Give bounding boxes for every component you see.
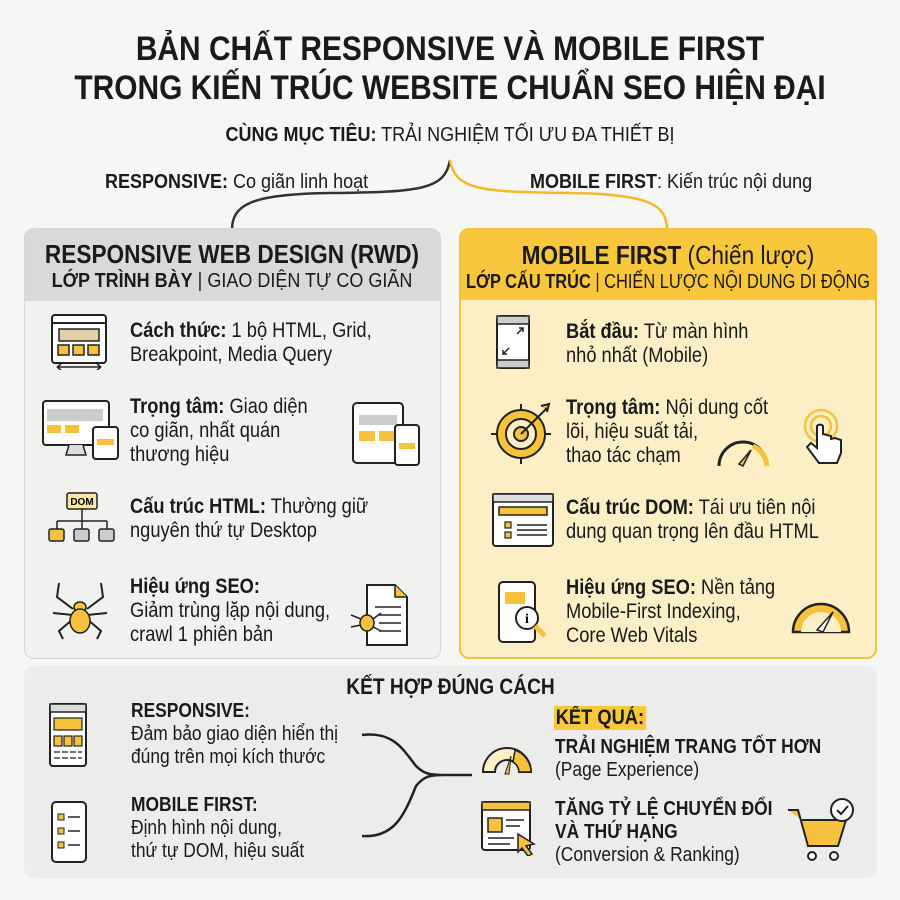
text: cấu trúc html: [130, 495, 368, 542]
text: hiệu ứng seo: Hiệu ứng SEO:: [130, 575, 260, 598]
icon: target: [491, 402, 551, 464]
text: hiệu ứng seo: [130, 575, 330, 646]
text: hiệu ứng seo: Core Web Vitals: [566, 624, 697, 647]
title: BẢN CHẤT RESPONSIVE VÀ MOBILE FIRST: [136, 30, 764, 68]
text: mobile first: [131, 794, 304, 862]
icon: spider: [52, 582, 108, 640]
icon: gauge large: [792, 602, 850, 634]
text: responsive: RESPONSIVE:: [131, 700, 250, 722]
icon: cart with check: [788, 798, 854, 861]
text: hiệu ứng seo: [566, 576, 775, 647]
text: trọng tâm: lõi, hiệu suất tải,: [566, 420, 698, 443]
label: kết quả: KẾT QUẢ:: [556, 706, 644, 729]
text: trọng tâm: co giãn, nhất quán: [130, 419, 280, 442]
icon: browser click: [481, 801, 536, 856]
text: cấu trúc html: Cấu trúc HTML: Thường giữ: [130, 495, 368, 518]
text: better page experience: [555, 734, 821, 781]
text: trọng tâm: Trọng tâm: Giao diện: [130, 395, 308, 418]
icon: touch hand: [804, 408, 842, 464]
text: cấu trúc dom: dung quan trọng lên đầu HTML: [566, 520, 819, 543]
arrow: merge: [362, 733, 472, 838]
text: trọng tâm: [566, 396, 768, 467]
text: responsive: Đảm bảo giao diện hiển thị: [131, 723, 338, 745]
text: conversion & ranking: TĂNG TỶ LỆ CHUYỂN ĐỔI: [555, 798, 773, 820]
panel: responsive web design: [24, 228, 441, 659]
icon: phone with info magnifier: [498, 581, 547, 643]
panel header: [25, 229, 442, 301]
text: responsive: [131, 700, 338, 768]
text: trọng tâm: Trọng tâm: Nội dung cốt: [566, 396, 768, 419]
text: mobile first: thứ tự DOM, hiệu suất: [131, 840, 304, 862]
panel header: MOBILE FIRST (Chiến lược): [522, 240, 814, 270]
icon: layout grid: [51, 314, 107, 370]
text: cấu trúc dom: [566, 496, 819, 543]
icon: desktop and phone: [42, 400, 119, 460]
text: bắt đầu: [566, 319, 748, 367]
text: responsive: đúng trên mọi kích thước: [131, 746, 325, 768]
panel: mobile first: [459, 228, 877, 659]
panel: combine correctly: [24, 666, 877, 878]
icon: gauge: [482, 747, 532, 774]
icon: responsive layout: [49, 703, 87, 767]
connector curves: [230, 160, 668, 228]
text: better page experience: TRẢI NGHIỆM TRANG TỐT HƠN: [555, 736, 821, 758]
heading: kết hợp đúng cách: KẾT HỢP ĐÚNG CÁCH: [346, 674, 555, 699]
subtitle: common goal: CÙNG MỤC TIÊU: TRẢI NGHIỆM TỐI ƯU ĐA THIẾT BỊ: [225, 124, 675, 146]
text: hiệu ứng seo: Giảm trùng lặp nội dung,: [130, 599, 330, 622]
text: cấu trúc dom: Cấu trúc DOM: Tái ưu tiên nội: [566, 496, 815, 519]
text: hiệu ứng seo: Mobile-First Indexing,: [566, 600, 741, 623]
icon: tablet and phone: [352, 402, 420, 466]
text: conversion & ranking: VÀ THỨ HẠNG: [555, 821, 678, 843]
text: cấu trúc html: nguyên thứ tự Desktop: [130, 519, 317, 542]
icon: browser dom: [492, 493, 554, 547]
text: trọng tâm: [130, 395, 308, 466]
text: conversion & ranking: [555, 796, 773, 866]
panel header: RESPONSIVE WEB DESIGN (RWD): [45, 239, 419, 269]
panel header: LỚP TRÌNH BÀY | GIAO DIỆN TỰ CO GIÃN: [52, 270, 412, 292]
icon: DOM tree: [48, 492, 115, 542]
text: hiệu ứng seo: crawl 1 phiên bản: [130, 623, 273, 646]
text: hiệu ứng seo: Hiệu ứng SEO: Nền tảng: [566, 576, 775, 599]
panel header: [461, 230, 879, 300]
text: cách thức: Cách thức: 1 bộ HTML, Grid,: [130, 319, 372, 342]
label: mobile first: MOBILE FIRST: Kiến trúc nội dung: [530, 171, 812, 193]
text: conversion & ranking: (Conversion & Ranking): [555, 844, 740, 866]
icon: speed gauge small: [718, 440, 770, 467]
text: cách thức: Breakpoint, Media Query: [130, 343, 332, 366]
text: bắt đầu: nhỏ nhất (Mobile): [566, 344, 708, 367]
text: trọng tâm: thao tác chạm: [566, 444, 681, 467]
text: bắt đầu: Bắt đầu: Từ màn hình: [566, 320, 748, 343]
panel header: LỚP CẤU TRÚC | CHIẾN LƯỢC NỘI DUNG DI ĐỘNG: [466, 271, 870, 293]
label: responsive: RESPONSIVE: Co giãn linh hoạt: [105, 171, 368, 193]
text: mobile first: MOBILE FIRST:: [131, 794, 258, 816]
text: mobile first: Định hình nội dung,: [131, 817, 282, 839]
icon: mobile list: [51, 801, 87, 863]
title: TRONG KIẾN TRÚC WEBSITE CHUẨN SEO HIỆN ĐẠI: [74, 69, 826, 107]
icon: phone with info magnifier: i: [525, 612, 529, 627]
text: trọng tâm: thương hiệu: [130, 443, 229, 466]
text: cách thức: [130, 319, 372, 366]
icon: document with bug: [350, 584, 408, 646]
icon: DOM tree: DOM: [70, 497, 94, 508]
icon: phone with arrows: [496, 315, 530, 369]
text: better page experience: (Page Experience): [555, 759, 699, 781]
title: [74, 30, 826, 107]
